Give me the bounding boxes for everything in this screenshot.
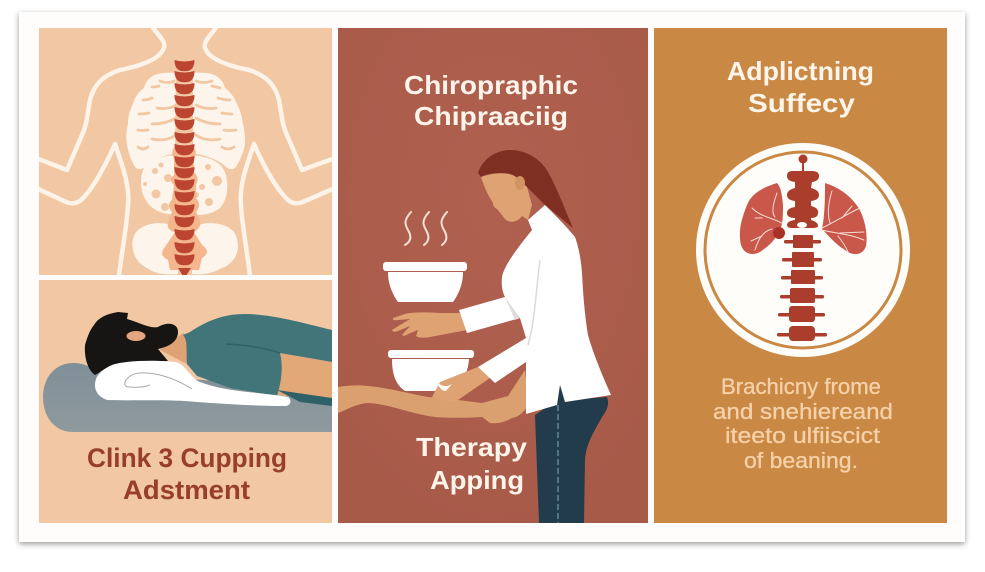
panel caption bbox=[416, 432, 528, 495]
panel: patient lying down bbox=[39, 280, 332, 523]
spine bbox=[162, 60, 207, 276]
panel caption bbox=[88, 448, 286, 500]
body outline bbox=[36, 26, 335, 276]
panel title bbox=[404, 70, 578, 131]
circular badge bbox=[696, 143, 910, 357]
patient torso bbox=[160, 314, 332, 406]
pelvis bbox=[132, 223, 238, 274]
panel description: Brachicny frome bbox=[721, 374, 881, 399]
panel caption: Apping bbox=[430, 465, 524, 495]
head bbox=[85, 312, 178, 375]
lower bowl bbox=[388, 350, 474, 391]
panel caption: Adstment bbox=[123, 475, 250, 505]
panel title: Chiropraphic bbox=[404, 70, 578, 100]
spine column bbox=[777, 154, 827, 341]
panel title: Suffecy bbox=[748, 88, 856, 118]
patient arm bbox=[338, 370, 529, 423]
panel title bbox=[727, 56, 874, 118]
panel description: and snehiereand bbox=[713, 399, 893, 424]
panel description: iteeto ulfiiscict bbox=[725, 423, 880, 448]
cushion bbox=[43, 363, 332, 432]
ribcage bbox=[126, 72, 245, 169]
panel title: Chipraaciig bbox=[414, 101, 568, 131]
panel caption: Clink 3 Cupping bbox=[87, 443, 287, 473]
panel: lungs and spine badge bbox=[654, 28, 947, 523]
panel description bbox=[713, 374, 893, 473]
upper bowl bbox=[383, 262, 467, 302]
panel title: Adplictning bbox=[727, 56, 874, 86]
pillow bbox=[95, 361, 290, 406]
panel caption: Therapy bbox=[416, 432, 528, 462]
steam bbox=[405, 212, 447, 245]
abdomen bbox=[141, 155, 227, 215]
panel: spine and torso bbox=[36, 26, 335, 276]
panel: therapist with bowls bbox=[338, 28, 648, 523]
therapist bbox=[392, 150, 611, 523]
lungs bbox=[740, 183, 867, 254]
panel description: of beaning. bbox=[744, 448, 858, 473]
